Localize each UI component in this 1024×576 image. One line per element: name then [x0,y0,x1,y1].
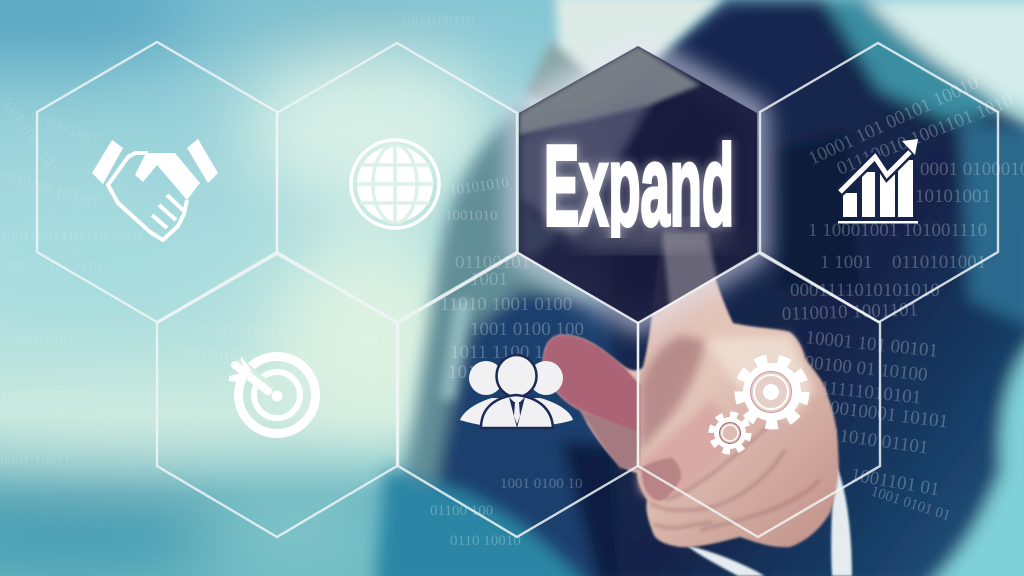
hexagon: gears [638,253,880,537]
text: 1001 0100 100 [470,319,584,340]
text: 01100101 [455,252,530,273]
index finger [640,400,740,497]
binary code texture: 0001 10011 [0,453,71,469]
text: 10001 101 00101 10010 [805,72,982,170]
binary code texture: 00100111 1110 [10,258,102,274]
hand pointing [543,240,852,576]
thumb lower shadow [580,410,640,470]
hand body [543,240,839,547]
binary code texture: 01000 1001 [29,109,101,148]
binary code texture: 0010010 10 101010 [185,348,305,364]
text: 1 10001001 101001110 [808,220,987,241]
thumb [543,335,640,435]
text: 00010001 10101 [819,396,949,433]
text: 1011 1100 10 [450,342,553,363]
suit [375,0,1024,576]
icon: growth chart [838,139,918,224]
icon: globe [351,140,439,228]
binary code texture: 0010100 100101 [0,168,101,212]
icon: gears [712,359,805,452]
binary code texture: 10011001011 [0,228,81,244]
text: 10001 101 00101 [804,327,939,362]
text: 01100 100 [430,503,493,519]
binary code texture: 1000100110 [400,13,474,29]
binary code texture: 1101010 10011 [190,323,283,339]
hand shadow [640,335,705,455]
hexagon: growth chart [760,43,998,322]
text: 1001 0101 01 [869,484,952,524]
text: 1001 0100 10 [500,476,582,492]
hexagon: Expand panel [519,46,757,330]
text: 011111010101 [809,376,922,409]
binary code texture: 1111 00 010001 [0,388,96,404]
binary code texture: 0100010101 [0,333,75,349]
text: 1001010 [445,208,498,224]
hexagon: globe [277,43,517,322]
fingernail [641,458,681,501]
icon: people [460,355,573,428]
text: 10101001 [915,186,991,207]
binary code texture: 1 11110 0010 [60,228,141,244]
hexagon: people [398,253,638,537]
shirt and tie [440,0,725,400]
binary code texture [0,13,474,469]
highlight [705,336,815,420]
text: 0001111010101010 [790,280,940,301]
text: 0110010 1001101 [781,299,918,325]
text: 0110 10010 [450,533,521,549]
text: 11010 01101 [829,424,930,459]
text: 10101010 [448,175,510,199]
text: 1001 [470,269,508,290]
shirt cuff [686,462,852,576]
text: 11010 1001 0100 [440,294,572,315]
hexagon: handshake [37,42,277,322]
text: 00100 01 10100 [803,352,928,386]
text: 01110010 1001101 1010 [834,90,1016,180]
text: 1 1001 [820,252,872,273]
hexagon: Expand panel: Expand [544,123,734,250]
finger creases [650,425,820,530]
icon: target [229,356,316,434]
icon: handshake [92,139,218,240]
hexagon: target [157,254,397,537]
text: 1001101 01 [849,464,941,500]
text: 1011 1010 [448,362,528,383]
text: 0110101001 [892,252,986,273]
